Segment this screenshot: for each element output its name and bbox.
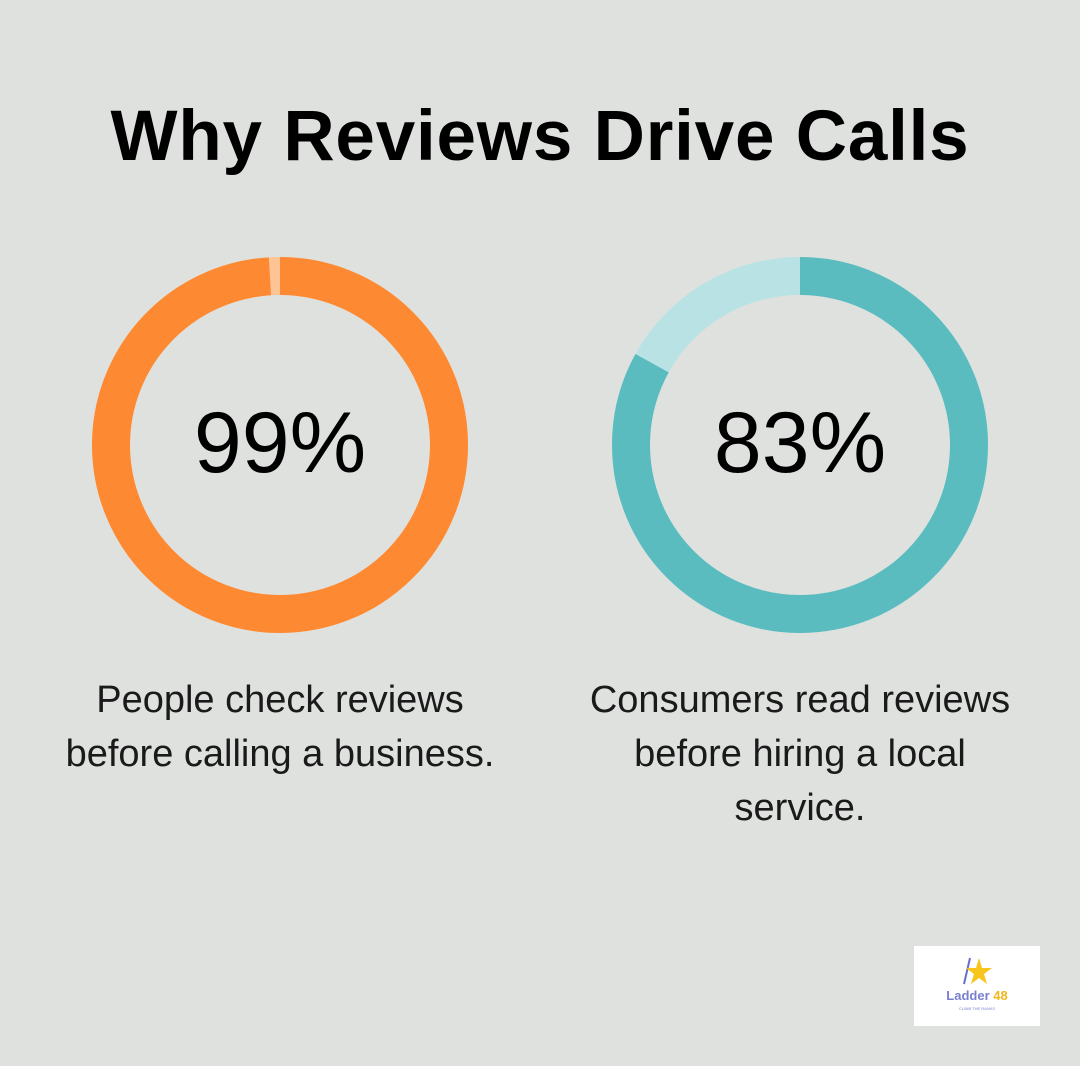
caption 1: before calling a business. bbox=[66, 733, 494, 775]
caption 2 bbox=[590, 679, 1010, 829]
donut: 83%: 83% bbox=[714, 395, 886, 491]
title: Why Reviews Drive Calls bbox=[111, 97, 969, 176]
logo: Ladder 48 bbox=[946, 988, 1008, 1003]
logo bbox=[914, 946, 1040, 1026]
donut: 99% bbox=[111, 276, 449, 614]
caption 2: Consumers read reviews bbox=[590, 679, 1010, 721]
caption 1 bbox=[66, 679, 494, 775]
donut: 99%: 99% bbox=[194, 395, 366, 491]
caption 2: before hiring a local bbox=[634, 733, 966, 775]
donut: 83% bbox=[631, 276, 969, 614]
caption 1: People check reviews bbox=[96, 679, 464, 721]
logo: CLIMB THE RANKS bbox=[959, 1006, 995, 1011]
caption 2: service. bbox=[735, 787, 865, 829]
